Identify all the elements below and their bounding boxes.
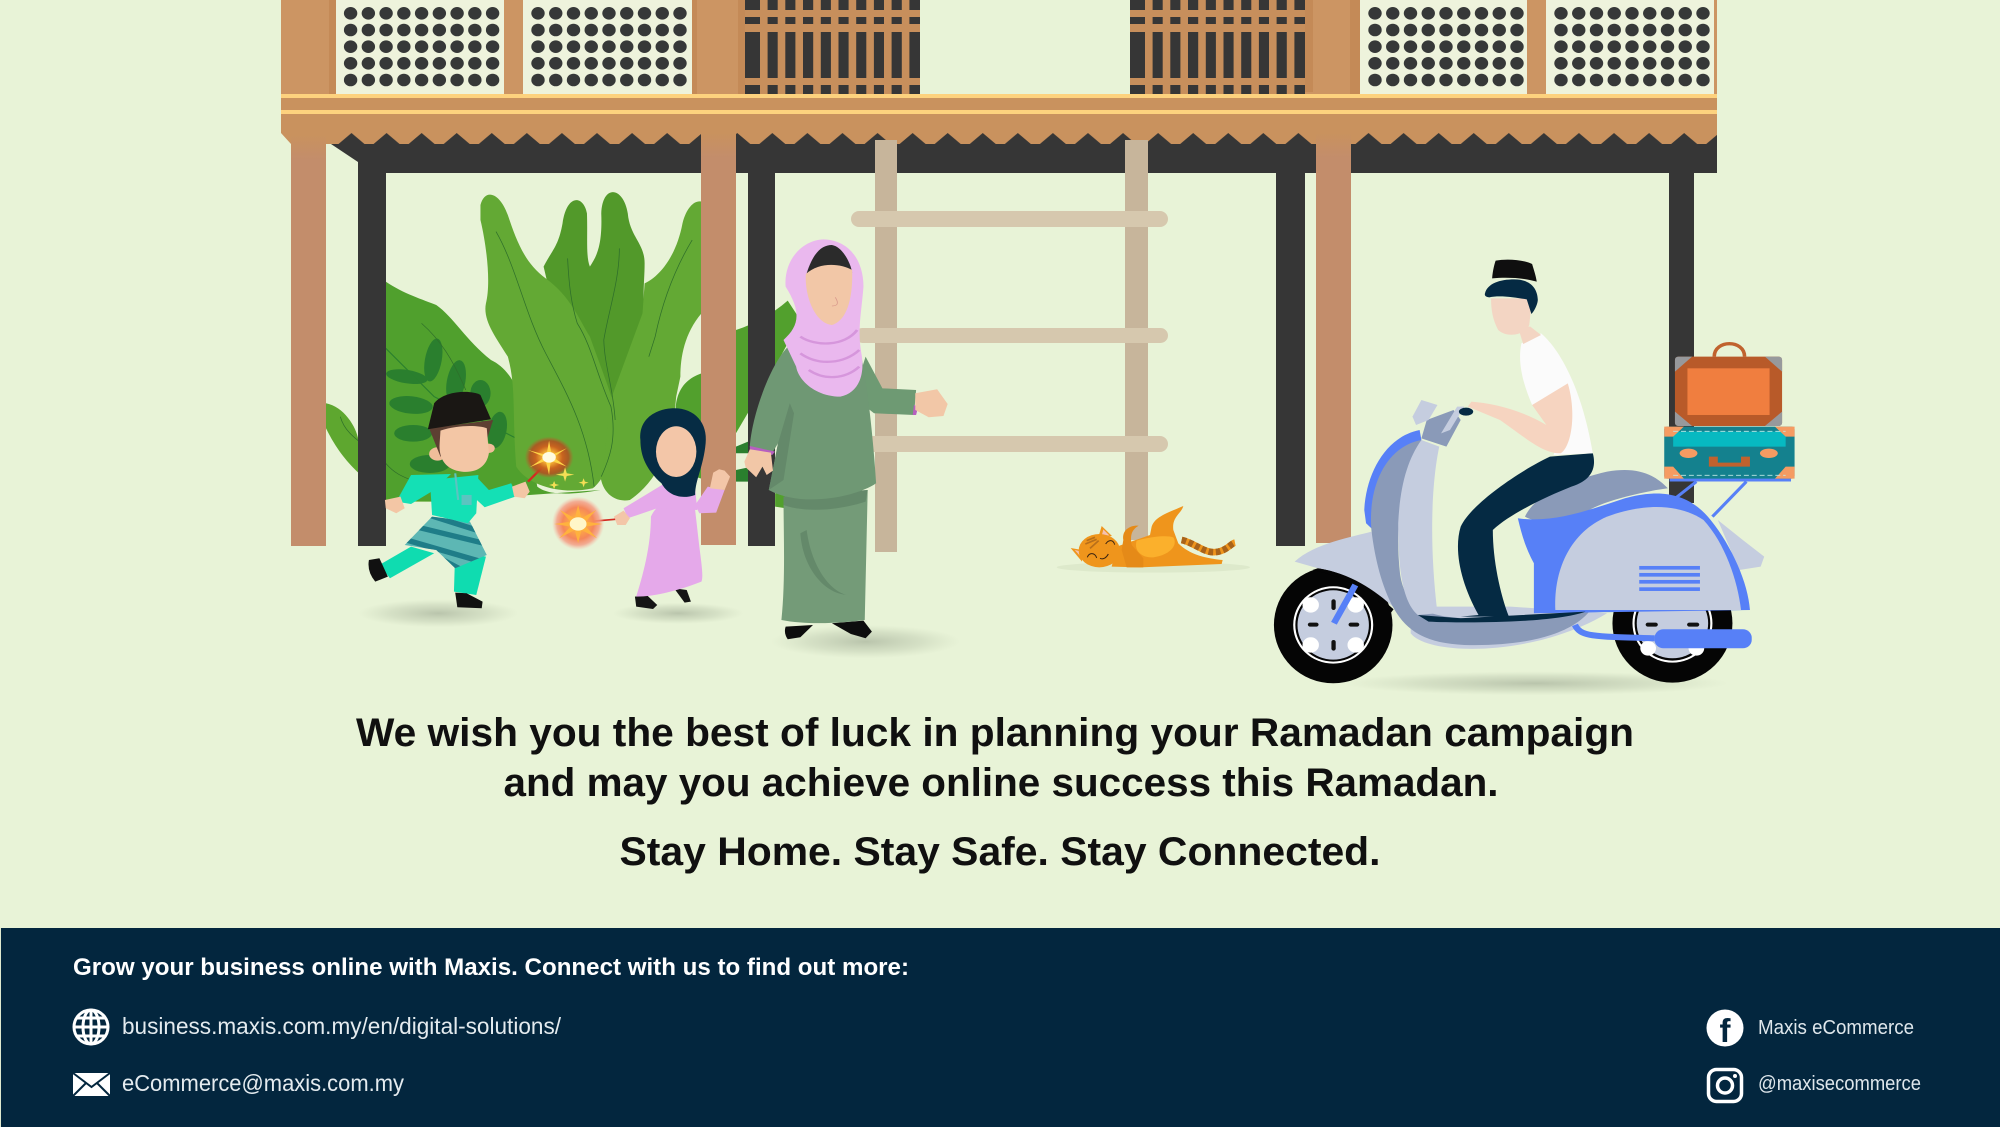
dark posts <box>358 173 1694 546</box>
icon: facebook <box>1706 1010 1744 1049</box>
boy with sparkler <box>358 392 589 627</box>
upper wall posts <box>281 0 1717 94</box>
ground shadow <box>1343 671 1729 695</box>
instagram handle: @maxisecommerce <box>1758 1073 1921 1095</box>
front fender <box>1295 532 1395 608</box>
perforated panel 4 <box>1546 0 1714 94</box>
slogan: Stay Home. Stay Safe. Stay Connected. <box>620 830 1380 874</box>
girl with sparkler <box>552 408 744 624</box>
icon: instagram <box>1708 1070 1742 1102</box>
icon: globe <box>74 1010 108 1044</box>
beam zigzag trim <box>334 133 1717 144</box>
rear wheel <box>1612 564 1732 683</box>
perforated panel 1 <box>336 0 504 94</box>
perforated panel 2 <box>523 0 692 94</box>
dark under-floor beam <box>331 144 1717 173</box>
footer band <box>0 928 2000 1127</box>
rider on scooter <box>1274 260 1795 695</box>
teal suitcase <box>1664 427 1795 479</box>
orange suitcase <box>1675 344 1782 426</box>
lattice window left <box>745 0 920 94</box>
website link: business.maxis.com.my/en/digital-solutions/ <box>122 1013 562 1039</box>
plants behind the house <box>326 192 869 508</box>
wooden stilts <box>291 133 1351 546</box>
plant: right large leaf <box>600 201 701 500</box>
plant: leaf veins <box>340 232 692 487</box>
family group <box>358 239 960 658</box>
ladder <box>851 140 1168 552</box>
email address: eCommerce@maxis.com.my <box>122 1070 404 1096</box>
sleeping cat <box>1057 506 1250 573</box>
plant: fern <box>384 338 516 473</box>
icon: envelope <box>73 1073 110 1096</box>
plant: central large leaf <box>480 195 617 491</box>
plant: back central leaf <box>544 192 659 473</box>
lattice window right <box>1130 0 1305 94</box>
plant: wide left leaf <box>386 282 600 502</box>
icon: facebook: f <box>1720 1012 1732 1049</box>
front wheel <box>1274 567 1392 683</box>
message <box>356 711 1634 874</box>
carved wooden floor beam <box>281 94 1717 144</box>
plant: leaves right of the post <box>664 301 869 508</box>
rider <box>1458 260 1594 617</box>
footer heading: Grow your business online with Maxis. Connect with us to find out more: <box>73 954 909 981</box>
scooter <box>1274 400 1791 683</box>
facebook handle: Maxis eCommerce <box>1758 1017 1914 1039</box>
message line 1: We wish you the best of luck in planning your Ramadan campaign <box>356 711 1634 755</box>
message line 2: and may you achieve online success this Ramadan. <box>504 761 1498 805</box>
mother <box>744 239 960 658</box>
perforated panel 3 <box>1360 0 1527 94</box>
plant: far left leaf <box>326 403 436 502</box>
house <box>281 0 1717 552</box>
